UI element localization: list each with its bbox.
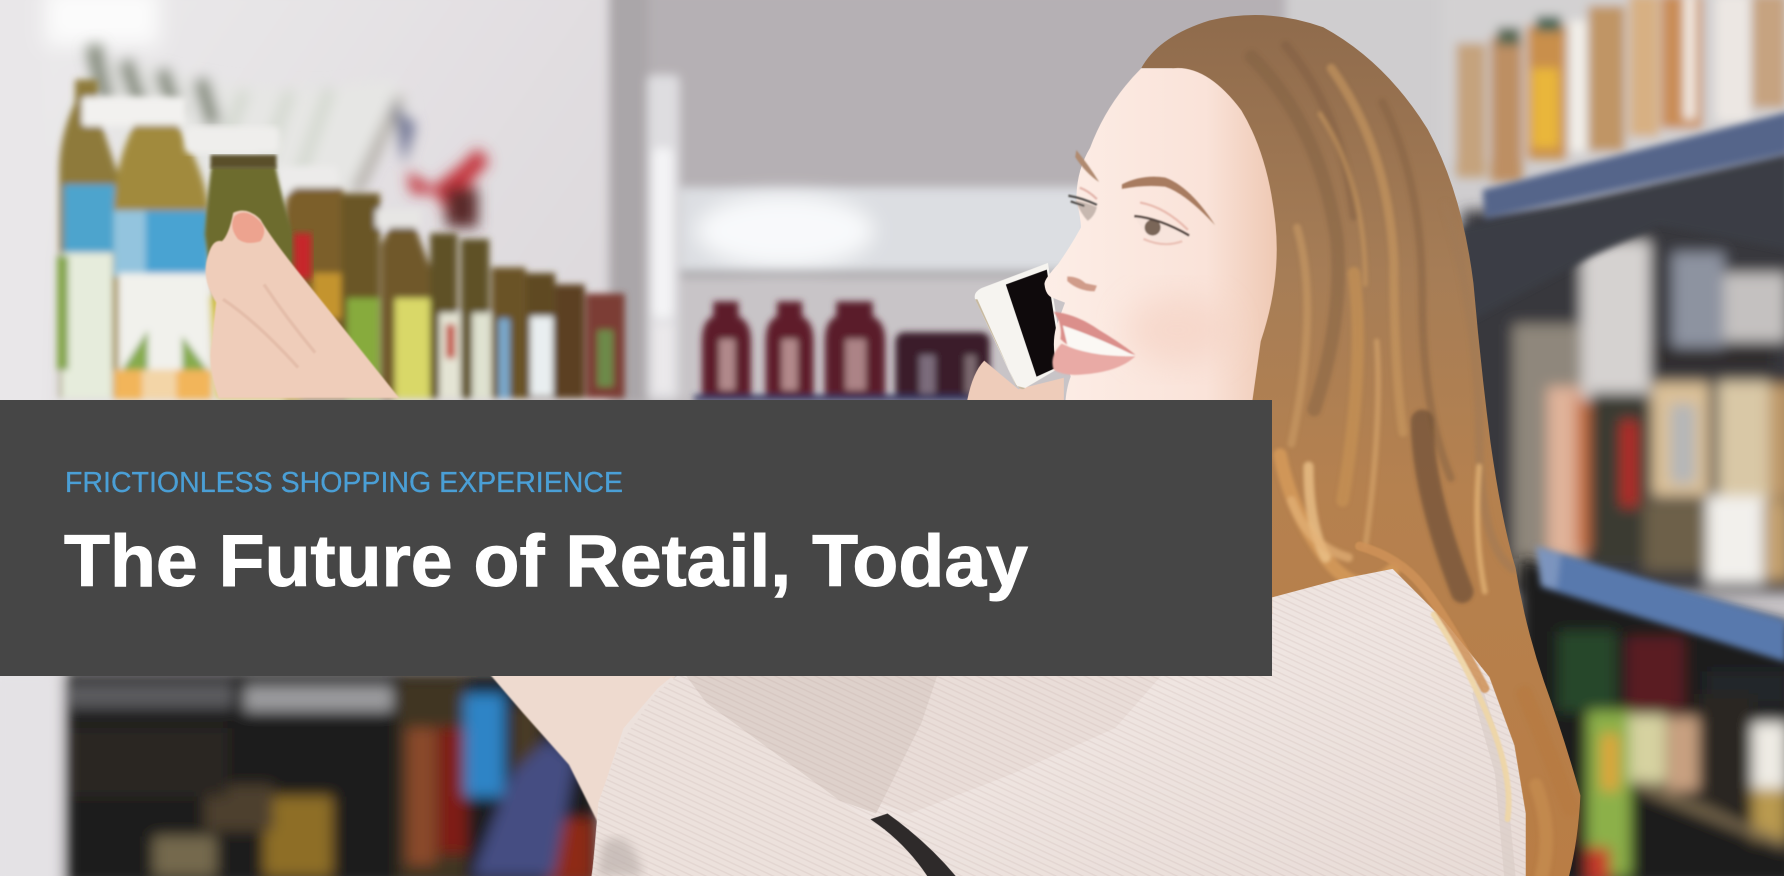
hand reaching for the jar <box>206 210 399 398</box>
watch band on the wrist <box>870 814 956 876</box>
sweater <box>592 569 1526 876</box>
long hair <box>1141 15 1580 876</box>
bottles: jar held by the hand <box>184 126 312 398</box>
lower right: dark bottom shelves with products <box>1519 558 1784 876</box>
upper right: top shelf edge and shadow <box>1462 112 1784 325</box>
banner panel <box>0 400 1272 676</box>
upper right: amber bottles on the top shelf <box>1443 0 1784 182</box>
books and decoration behind the left bottles <box>85 46 489 228</box>
hair strands over the shoulder <box>1360 546 1509 819</box>
phone held to the ear <box>975 263 1064 389</box>
lower right: blue second shelf edge <box>1536 546 1784 662</box>
middle right: products on the second shelf <box>1462 210 1784 592</box>
face in profile <box>1044 68 1277 406</box>
bottles: shelf row behind the hand <box>57 80 625 399</box>
hand holding the phone <box>967 361 1064 401</box>
facial features: brows, eyes, nose, mouth <box>1052 150 1215 375</box>
title: The Future of Retail, Today <box>64 521 1028 602</box>
bottles: maroon jars on the back shelf <box>694 302 990 402</box>
lower left: dark shelf of products <box>0 671 600 876</box>
forearm reaching up <box>489 674 677 821</box>
eyebrow text: FRICTIONLESS SHOPPING EXPERIENCE <box>65 467 623 499</box>
